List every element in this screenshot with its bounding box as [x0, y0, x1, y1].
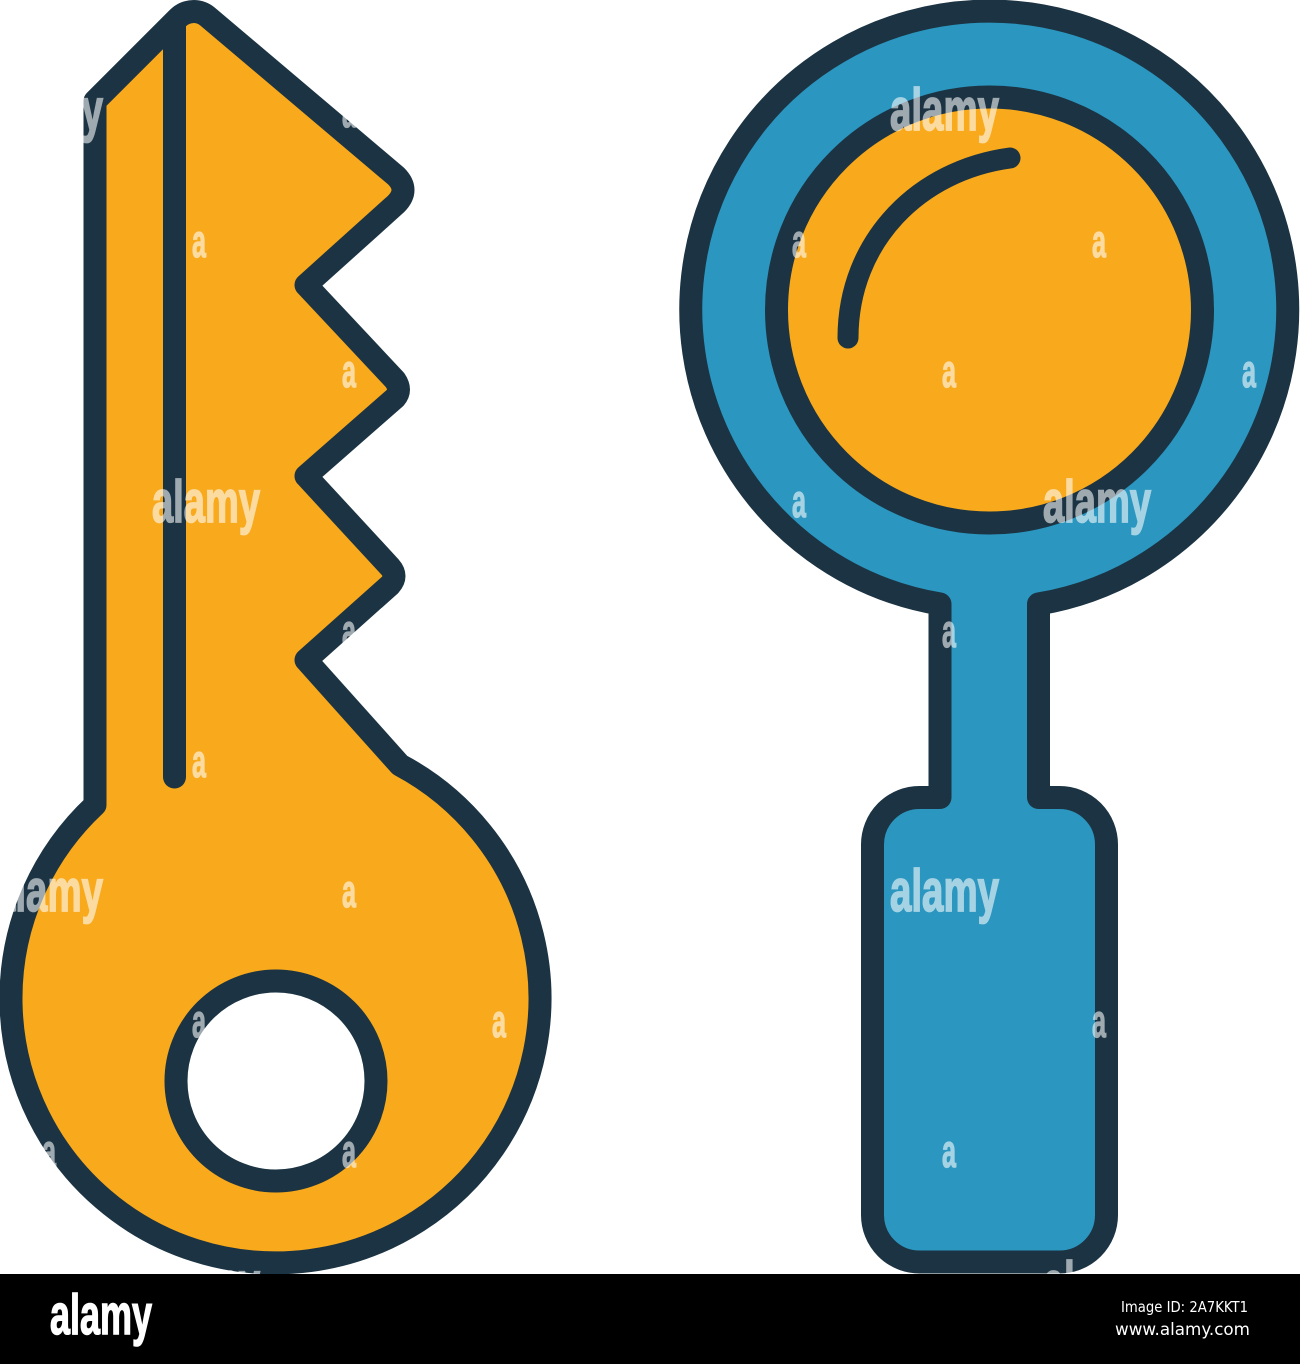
watermark: repeated logo text: alamy: [1043, 1250, 1151, 1316]
magnifier lens: [776, 97, 1202, 523]
watermark: small repeated letters: a: [342, 1125, 356, 1177]
watermark: repeated logo text: alamy: [152, 469, 260, 535]
footer logo: alamy: [50, 1283, 152, 1347]
magnifier frame and handle: [691, 11, 1288, 1262]
watermark: small repeated letters: a: [942, 345, 956, 397]
watermark: small repeated letters: [42, 85, 1256, 1177]
key hole: [176, 981, 376, 1181]
watermark: small repeated letters: a: [792, 475, 806, 527]
watermark: small repeated letters: a: [342, 605, 356, 657]
watermark: small repeated letters: a: [342, 85, 356, 137]
image id: Image ID: 2A7KKT1: [1121, 1298, 1248, 1316]
watermark: small repeated letters: a: [492, 995, 506, 1047]
footer bar: [0, 1274, 1300, 1364]
watermark: small repeated letters: a: [942, 1125, 956, 1177]
watermark: small repeated letters: a: [192, 995, 206, 1047]
key groove line: [163, 22, 186, 777]
icon: key: [11, 12, 540, 1263]
watermark: repeated logo text: alamy: [890, 858, 999, 924]
watermark: small repeated letters: a: [42, 1125, 56, 1177]
watermark: small repeated letters: a: [1092, 995, 1106, 1047]
lens highlight: [848, 158, 1010, 338]
watermark: small repeated letters: a: [192, 735, 206, 787]
key body: [11, 12, 540, 1263]
icon: magnifier: [691, 11, 1288, 1262]
watermark: small repeated letters: a: [1092, 215, 1106, 267]
website: www.alamy.com: [1115, 1320, 1250, 1340]
watermark: small repeated letters: a: [942, 605, 956, 657]
watermark: small repeated letters: a: [792, 215, 806, 267]
watermark: small repeated letters: a: [342, 865, 356, 917]
watermark: repeated logo text: alamy: [890, 77, 999, 143]
watermark: small repeated letters: a: [192, 215, 206, 267]
watermark: small repeated letters: a: [342, 345, 356, 397]
watermark: repeated logo text: alamy: [1043, 469, 1151, 535]
watermark: repeated logo text: alamy: [152, 1250, 260, 1316]
watermark: small repeated letters: a: [1242, 345, 1256, 397]
